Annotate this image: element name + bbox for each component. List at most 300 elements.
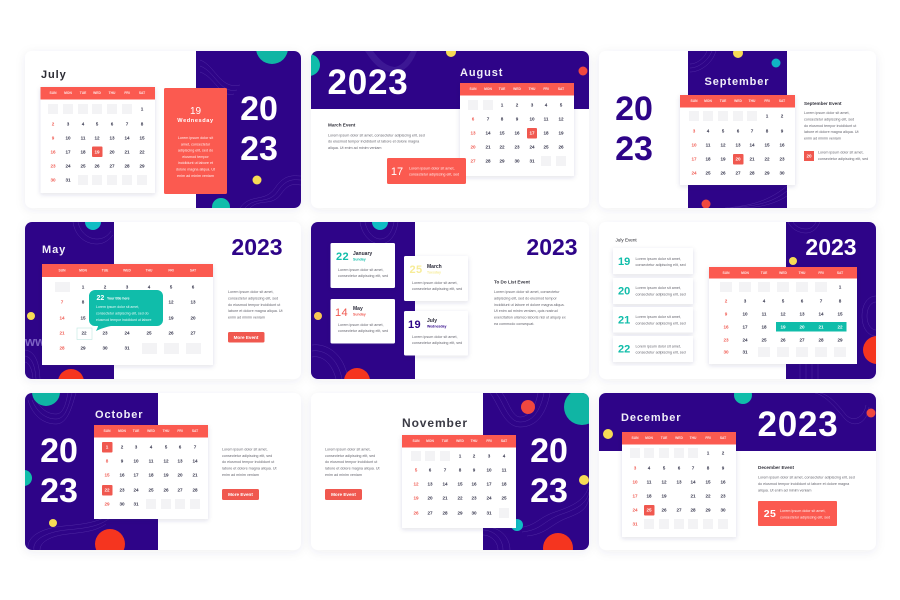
calendar: July: 25 [80, 164, 86, 169]
calendar: October: 29 [104, 502, 110, 507]
calendar: July with highlighted week: 21 [818, 325, 824, 330]
calendar: August: 28 [485, 159, 491, 164]
calendar: July with highlighted week: 26 [780, 338, 786, 343]
calendar: August: SUN [470, 87, 477, 91]
calendar: September: 13 [735, 143, 741, 148]
calendar: November: 2 [473, 454, 476, 459]
calendar: July: 13 [109, 136, 115, 141]
calendar: July: 12 [94, 136, 100, 141]
calendar: September: 30 [779, 171, 785, 176]
calendar: August [460, 83, 574, 176]
calendar: July with highlighted week: 31 [742, 350, 748, 355]
calendar: October: 6 [179, 445, 182, 450]
year: 20 23 [615, 90, 653, 168]
calendar: August: 26 [558, 145, 564, 150]
calendar: July with highlighted week: 4 [763, 299, 766, 304]
calendar: July with highlighted week: 1 [839, 285, 842, 290]
calendar: October: 1 [106, 445, 109, 450]
calendar: November: 28 [442, 511, 448, 516]
calendar: August: 16 [514, 131, 520, 136]
calendar: July: 28 [124, 164, 130, 169]
calendar: September: 12 [720, 143, 726, 148]
calendar: July with highlighted week: MON [741, 271, 749, 275]
panel: December slide [599, 386, 876, 550]
text block: March Event: Lorem ipsum dolor sit amet, consectetur adipiscing elit, sed [328, 134, 425, 138]
calendar: August: THU [529, 87, 536, 91]
panel: May slide [24, 222, 302, 382]
year: 2023: 2023 [327, 63, 409, 102]
text block: October description: do eiusmod tempor incididunt ut [222, 460, 274, 464]
calendar: July: 27 [109, 164, 115, 169]
title: September: September [705, 76, 769, 88]
calendar: September: 8 [766, 129, 769, 134]
date card: 25 March [404, 256, 468, 301]
calendar: July with highlighted week: 13 [799, 312, 805, 317]
calendar: December: 16 [720, 480, 726, 485]
year: 2023: 2023 [757, 405, 839, 444]
year: 20 23: 23 [40, 472, 78, 510]
date card: 14 May: 14 [335, 307, 348, 319]
calendar: August: 13 [470, 131, 476, 136]
calendar: November: 14 [442, 482, 448, 487]
calendar: August: 22 [499, 145, 505, 150]
text block: To Do List Event: Ut enim ad minim veniam, quis nostrud [494, 309, 558, 313]
calendar: September: 29 [764, 171, 770, 176]
calendar: July [40, 87, 155, 193]
year: 2023: 2023 [526, 234, 578, 260]
purple banner with circles [311, 51, 589, 109]
calendar: September: 24 [691, 171, 697, 176]
event card: 17: 17 [391, 166, 403, 178]
calendar: September: 17 [691, 157, 697, 162]
calendar: July with highlighted week: 5 [782, 299, 785, 304]
calendar: July: 14 [124, 136, 130, 141]
calendar: December: 12 [661, 480, 667, 485]
calendar: November: 8 [459, 468, 462, 473]
calendar: December: 3 [634, 466, 637, 471]
calendar: August: 1 [501, 103, 504, 108]
purple column with circles [25, 222, 114, 379]
calendar: July with highlighted week: 7 [820, 299, 823, 304]
calendar: December [622, 432, 736, 537]
calendar: July: 26 [94, 164, 100, 169]
calendar: December: 22 [705, 494, 711, 499]
calendar: December: 4 [648, 466, 651, 471]
calendar: October: 20 [177, 473, 183, 478]
calendar: May: WED [123, 269, 131, 273]
calendar: October: 25 [148, 488, 154, 493]
calendar: July: FRI [124, 91, 130, 95]
date card: 22 January: January [353, 251, 372, 257]
year: 20 23 [40, 432, 78, 510]
purple column with circles [25, 393, 158, 550]
calendar: October: TUE [133, 429, 140, 433]
calendar: November: 17 [486, 482, 492, 487]
calendar: November [402, 435, 516, 528]
calendar: November: 1 [459, 454, 462, 459]
calendar: July with highlighted week: 24 [742, 338, 748, 343]
year: 20 23: 23 [240, 130, 278, 168]
calendar: August: 7 [487, 117, 490, 122]
calendar: July: 2 [52, 122, 55, 127]
text block: To Do List Event: ea commodo consequat. [494, 322, 534, 326]
calendar: September: 6 [737, 129, 740, 134]
calendar: July with highlighted week: 23 [723, 338, 729, 343]
calendar: December: 26 [661, 508, 667, 513]
event note: 20: consectetur adipiscing elit, sed [818, 157, 868, 161]
calendar: November: 29 [457, 511, 463, 516]
calendar: May: 23 [102, 331, 108, 336]
text block: To Do List Event: exercitation ullamco laboris nisi ut aliquip ex [494, 316, 566, 320]
calendar: July: 9 [52, 136, 55, 141]
button: More Event [222, 489, 259, 500]
calendar: August: 2 [516, 103, 519, 108]
button: More Event [325, 489, 362, 500]
calendar: December: 28 [690, 508, 696, 513]
date card: 25 March: March [427, 264, 442, 270]
calendar: July: MON [64, 91, 72, 95]
calendar: September: 5 [722, 129, 725, 134]
calendar: August: 31 [529, 159, 535, 164]
date card: 14 May: May [353, 306, 363, 312]
calendar: October: 16 [119, 473, 125, 478]
calendar: September: 25 [705, 171, 711, 176]
year: 20 23: 23 [615, 130, 653, 168]
event card: 25: 25 [764, 508, 776, 520]
calendar: May: SAT [190, 269, 196, 273]
calendar: November: 27 [427, 511, 433, 516]
text block: To Do List Event [494, 280, 566, 326]
date card: 19 July: July [427, 318, 437, 324]
calendar: July: SAT [139, 91, 145, 95]
calendar: November: 25 [501, 496, 507, 501]
calendar: November: 20 [427, 496, 433, 501]
calendar: October: 22 [104, 488, 110, 493]
calendar: July: 16 [50, 150, 56, 155]
calendar: July with highlighted week: TUE [761, 271, 768, 275]
text block: May description: consectetur adipiscing elit, sed [228, 296, 278, 300]
calendar: October: 8 [106, 459, 109, 464]
calendar: July with highlighted week: 22 [837, 325, 843, 330]
calendar: May: MON [79, 269, 87, 273]
calendar: May: 31 [124, 346, 130, 351]
event card: 25: consectetur adipiscing elit, sed [780, 516, 830, 520]
button: More Event [228, 332, 264, 342]
calendar: October: 19 [163, 473, 169, 478]
text block: September Event: September Event [804, 101, 842, 106]
calendar: September: 19 [720, 157, 726, 162]
calendar: July with highlighted week: 9 [725, 312, 728, 317]
calendar: October: 28 [192, 488, 198, 493]
date card: 22 January: Sunday [353, 258, 366, 262]
text block: December Event: December Event [758, 465, 794, 470]
calendar: September: 26 [720, 171, 726, 176]
calendar: May: 5 [170, 285, 173, 290]
calendar: July with highlighted week: 16 [723, 325, 729, 330]
date card: 14 May: consectetur adipiscing elit, sed [338, 329, 388, 333]
event note: 20: 20 [806, 154, 812, 158]
date card: 19 [613, 248, 693, 274]
text block: September Event: consectetur adipiscing elit, sed [804, 118, 854, 122]
calendar: September: TUE [720, 99, 727, 103]
panel: July slide [24, 51, 302, 211]
calendar: October: 23 [119, 488, 125, 493]
calendar: December: 7 [692, 466, 695, 471]
calendar: December: 23 [720, 494, 726, 499]
calendar: November: 26 [413, 511, 419, 516]
calendar: October: 7 [194, 445, 197, 450]
calendar: August: 10 [529, 117, 535, 122]
calendar: July with highlighted week: 3 [744, 299, 747, 304]
calendar: October: WED [147, 429, 155, 433]
calendar: May: 27 [190, 331, 196, 336]
calendar: May: 3 [126, 285, 129, 290]
calendar: July: 31 [65, 178, 71, 183]
icon: yellow dot [579, 475, 589, 485]
calendar: October: 26 [163, 488, 169, 493]
calendar: December: 14 [690, 480, 696, 485]
calendar: July with highlighted week: 28 [818, 338, 824, 343]
calendar: October: 10 [133, 459, 139, 464]
year: 20 23: 20 [240, 90, 278, 128]
calendar: November: 4 [503, 454, 506, 459]
calendar: November: THU [471, 439, 478, 443]
calendar: August: 30 [514, 159, 520, 164]
callout: teal speech bubble: Your title here [107, 296, 130, 300]
year: 2023: 2023 [805, 234, 857, 260]
callout: teal speech bubble: eiusmod tempor incididunt ut labore [96, 318, 152, 322]
date card: 25 March: Lorem ipsum dolor sit amet, [412, 281, 458, 285]
calendar: October: SAT [192, 429, 198, 433]
purple column with circles [688, 48, 787, 208]
date card: 19 July: Lorem ipsum dolor sit amet, [412, 335, 458, 339]
event card: 19 Wednesday: adipiscing elit, sed do [178, 149, 213, 153]
text block: March Event: do eiusmod tempor incididunt ut labore et dolore magna [328, 140, 420, 144]
calendar: July with highlighted week: SUN [723, 271, 730, 275]
calendar: May: 15 [80, 316, 86, 321]
calendar: July with highlighted week [709, 267, 857, 364]
calendar: May: 1 [82, 285, 85, 290]
calendar: August: 4 [545, 103, 548, 108]
event card: 17: consectetur adipiscing elit, sed [409, 173, 459, 177]
text block: September Event: labore et dolore magna aliqua. Ut [804, 130, 859, 134]
text block: To Do List Event: Lorem ipsum dolor sit amet, consectetur [494, 290, 560, 294]
calendar: November: 3 [488, 454, 491, 459]
calendar: July: 30 [50, 178, 56, 183]
calendar: July with highlighted week: FRI [818, 271, 824, 275]
calendar: May: 4 [148, 285, 151, 290]
calendar: November: 19 [413, 496, 419, 501]
text block: September Event: Lorem ipsum dolor sit amet, [804, 111, 850, 115]
calendar: August: 17 [529, 131, 535, 136]
calendar: May [42, 264, 213, 365]
calendar: September: 14 [749, 143, 755, 148]
calendar: September: 1 [766, 114, 769, 119]
event card: 17 [387, 158, 466, 184]
calendar: November: 16 [471, 482, 477, 487]
calendar: December: MON [645, 436, 653, 440]
calendar: July: 24 [65, 164, 71, 169]
event card: 19 Wednesday [164, 88, 227, 194]
calendar: May: 21 [59, 331, 65, 336]
calendar: July with highlighted week: 14 [818, 312, 824, 317]
calendar: August: 18 [543, 131, 549, 136]
calendar: May: 6 [192, 285, 195, 290]
date card: 22: 22 [618, 344, 630, 356]
date card: 19 July [404, 311, 468, 356]
calendar: August: WED [513, 87, 521, 91]
calendar: October: MON [118, 429, 126, 433]
calendar: July: 4 [82, 122, 85, 127]
calendar: December: FRI [705, 436, 711, 440]
calendar: December: 15 [705, 480, 711, 485]
calendar: December: 9 [722, 466, 725, 471]
calendar: October: 14 [192, 459, 198, 464]
panel: October slide [24, 393, 302, 553]
text block: October description: Lorem ipsum dolor sit amet, [222, 448, 268, 452]
calendar: December: 8 [707, 466, 710, 471]
event note: 20: Lorem ipsum dolor sit amet, [818, 150, 864, 154]
date card: 21: 21 [618, 314, 630, 326]
calendar: July with highlighted week: 17 [742, 325, 748, 330]
date card: 20: Lorem ipsum dolor sit amet, [636, 286, 681, 290]
text block: September Event [804, 101, 859, 140]
calendar: September: 22 [764, 157, 770, 162]
calendar: November: 22 [457, 496, 463, 501]
calendar: October: 18 [148, 473, 154, 478]
calendar: October: SUN [104, 429, 111, 433]
year: 20 23: 20 [530, 432, 568, 470]
calendar: December: 5 [663, 466, 666, 471]
panel: August slide [298, 47, 589, 208]
calendar: May: 22 [81, 331, 87, 336]
calendar: August: SAT [558, 87, 564, 91]
calendar: May: 2 [104, 285, 107, 290]
calendar: August: 15 [499, 131, 505, 136]
calendar: July: 22 [139, 150, 145, 155]
calendar: August: 5 [560, 103, 563, 108]
purple column with circles: ww [24, 334, 46, 349]
year: 2023: 2023 [231, 234, 283, 260]
event card: 17: Lorem ipsum dolor sit amet, [409, 166, 454, 170]
calendar: July: 21 [124, 150, 130, 155]
text block: November description: enim ad minim veniam [325, 473, 362, 477]
calendar: December: WED [675, 436, 683, 440]
calendar: September: SAT [779, 99, 785, 103]
calendar: September: FRI [764, 99, 770, 103]
calendar: September: 11 [706, 143, 711, 148]
calendar: July with highlighted week: 11 [762, 312, 767, 317]
calendar: July with highlighted week: 10 [742, 312, 748, 317]
calendar: October: 12 [163, 459, 169, 464]
year: 20 23 [240, 90, 278, 168]
calendar: August: 27 [470, 159, 476, 164]
calendar: May: 24 [124, 331, 130, 336]
calendar: November: 13 [427, 482, 433, 487]
date card: 19 July: consectetur adipiscing elit, sed [412, 341, 462, 345]
title: August: August [460, 67, 503, 79]
text block: December Event [758, 465, 855, 492]
title: November: November [402, 416, 468, 430]
calendar: October: 11 [149, 459, 154, 464]
title: October: October [95, 409, 143, 421]
calendar: November: 24 [486, 496, 492, 501]
calendar: October [94, 425, 208, 519]
calendar: July: 6 [111, 122, 114, 127]
panel: July Event slide [599, 222, 891, 379]
calendar: July: SUN [50, 91, 57, 95]
calendar: November: 9 [473, 468, 476, 473]
calendar: July: TUE [80, 91, 87, 95]
calendar: May: 26 [168, 331, 174, 336]
button: More Event: More Event [331, 492, 356, 497]
calendar: July with highlighted week: 18 [761, 325, 767, 330]
calendar: May: FRI [168, 269, 174, 273]
calendar: December: 24 [632, 508, 638, 513]
text block: November description: consectetur adipiscing elit, sed [325, 454, 375, 458]
callout: teal speech bubble [89, 290, 163, 331]
calendar: July with highlighted week: WED [779, 271, 787, 275]
calendar: August: 14 [485, 131, 491, 136]
calendar: October: 9 [121, 459, 124, 464]
text block: November description: labore et dolore magna aliqua. Ut [325, 466, 380, 470]
calendar: November: FRI [486, 439, 492, 443]
calendar: August: TUE [499, 87, 506, 91]
icon: yellow dot [789, 257, 797, 265]
callout: teal speech bubble: consectetur adipiscing elit, sed do [96, 312, 149, 316]
calendar: May: 7 [61, 300, 64, 305]
calendar: July with highlighted week: 6 [801, 299, 804, 304]
calendar: September: 7 [751, 129, 754, 134]
button: More Event: More Event [234, 335, 259, 340]
date card: 25 March: Tuesday [427, 270, 441, 274]
calendar: July with highlighted week: 27 [799, 338, 805, 343]
calendar: September: 2 [781, 114, 784, 119]
calendar: November: SUN [413, 439, 420, 443]
calendar: September: WED [734, 99, 742, 103]
calendar: May: 20 [190, 316, 196, 321]
year: 20 23: 20 [615, 90, 653, 128]
text block: To Do List Event: To Do List Event [494, 280, 530, 284]
calendar: November: 11 [502, 468, 507, 473]
calendar: December: 13 [676, 480, 682, 485]
calendar: May: 12 [168, 300, 174, 305]
date card: 22 January: Lorem ipsum dolor sit amet, [338, 268, 384, 272]
event card: 19 Wednesday: amet, consectetur [181, 142, 211, 146]
calendar: September: 27 [735, 171, 741, 176]
date card: 20 [613, 278, 693, 304]
event card: 19 Wednesday: 19 [190, 106, 201, 117]
calendar: August: FRI [543, 87, 549, 91]
date card: 21: Lorem ipsum dolor sit amet, [636, 315, 681, 319]
calendar: December: 30 [720, 508, 726, 513]
calendar: November: 18 [501, 482, 507, 487]
date card: 22: consectetur adipiscing elit, sed [636, 350, 686, 354]
text block: October description [222, 448, 277, 477]
date card: 19 July: 19 [408, 319, 421, 331]
text block: October description: enim ad minim veniam [222, 473, 259, 477]
calendar: November: 15 [457, 482, 463, 487]
calendar: September: 15 [764, 143, 770, 148]
date card: 20: 20 [618, 286, 630, 298]
calendar: July: 29 [139, 164, 145, 169]
calendar: October: 13 [177, 459, 183, 464]
calendar: August: 25 [543, 145, 549, 150]
event card: 19 Wednesday: enim ad minim veniam [177, 174, 214, 178]
calendar: May: 25 [146, 331, 152, 336]
calendar: September: 9 [781, 129, 784, 134]
calendar: December: 10 [632, 480, 638, 485]
